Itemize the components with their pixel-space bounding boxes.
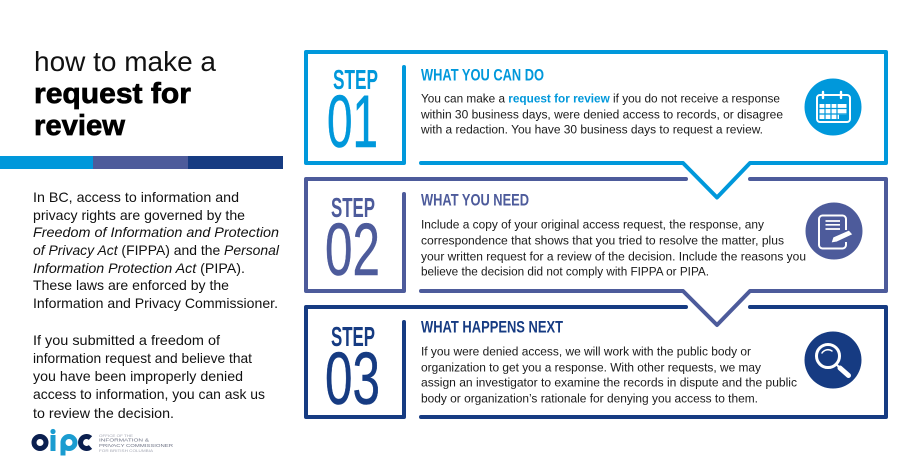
second paragraph: you have been improperly denied	[33, 368, 243, 384]
panel: step 3: 03	[325, 337, 380, 420]
title: how to make a	[34, 46, 216, 77]
logo: OIPC: PRIVACY COMMISSIONER	[99, 443, 174, 448]
panel: step 3: body or organization’s rationale for denying you access to them.	[421, 392, 758, 406]
intro paragraph: In BC, access to information and	[33, 189, 239, 205]
panel: step 2: Include a copy of your original access request, the response, any	[421, 218, 765, 232]
panel: step 1: with a redaction. You have 30 business days to request a review.	[420, 122, 763, 136]
panel: step 3	[306, 307, 886, 420]
logo: OIPC: INFORMATION &	[99, 438, 149, 442]
panel: step 2: STEP	[331, 192, 375, 223]
panel: step 1: 01	[327, 80, 378, 163]
intro paragraph: Information and Privacy Commissioner.	[33, 295, 278, 311]
panel: step 1: within 30 business days, were denied access to records, or disagree	[420, 108, 783, 122]
panel: step 2: WHAT YOU NEED	[421, 192, 529, 210]
second paragraph: access to information, you can ask us	[33, 386, 265, 402]
panel: step 2	[306, 179, 886, 325]
panel: step 3: If you were denied access, we will work with the public body or	[421, 344, 751, 358]
intro paragraph	[33, 189, 280, 311]
intro paragraph: Information Protection Act (PIPA).	[33, 260, 245, 276]
tri-colour bar	[0, 156, 283, 169]
panel: step 3: organization to get you a response. With other requests, we may	[421, 360, 762, 374]
panel: step 1: STEP	[333, 64, 378, 95]
intro paragraph: privacy rights are governed by the	[33, 207, 245, 223]
logo: OIPC: OFFICE OF THE	[99, 434, 134, 438]
panel: step 2: your written request for a review of the decision. Include the reasons you	[421, 250, 806, 264]
second paragraph: information request and believe that	[33, 350, 252, 366]
panel: step 1	[306, 52, 886, 198]
panel: step 1: WHAT YOU CAN DO	[421, 66, 544, 84]
title: request for	[34, 78, 191, 110]
logo: OIPC	[34, 429, 174, 456]
second paragraph: If you submitted a freedom of	[33, 332, 220, 348]
panel: step 2: correspondence that shows that you tried to resolve the matter, plus	[421, 234, 784, 248]
panel: step 3: STEP	[331, 321, 375, 352]
second paragraph: to review the decision.	[33, 405, 174, 421]
panel: step 2: believe the decision did not comply with FIPPA or PIPA.	[421, 264, 709, 278]
panel: step 2: 02	[325, 208, 380, 291]
panel: step 3: WHAT HAPPENS NEXT	[421, 318, 563, 336]
logo: OIPC: FOR BRITISH COLUMBIA	[99, 449, 154, 453]
intro paragraph: These laws are enforced by the	[33, 277, 229, 293]
panel: step 1: You can make a request for review if you do not receive a response	[421, 92, 780, 106]
intro paragraph: Freedom of Information and Protection	[33, 224, 279, 240]
second paragraph	[33, 332, 265, 421]
intro paragraph: of Privacy Act (FIPPA) and the Personal	[33, 242, 280, 258]
panel: step 3: assign an investigator to examine the records in dispute and the public	[421, 376, 797, 390]
title	[34, 46, 216, 142]
title: review	[34, 110, 125, 142]
